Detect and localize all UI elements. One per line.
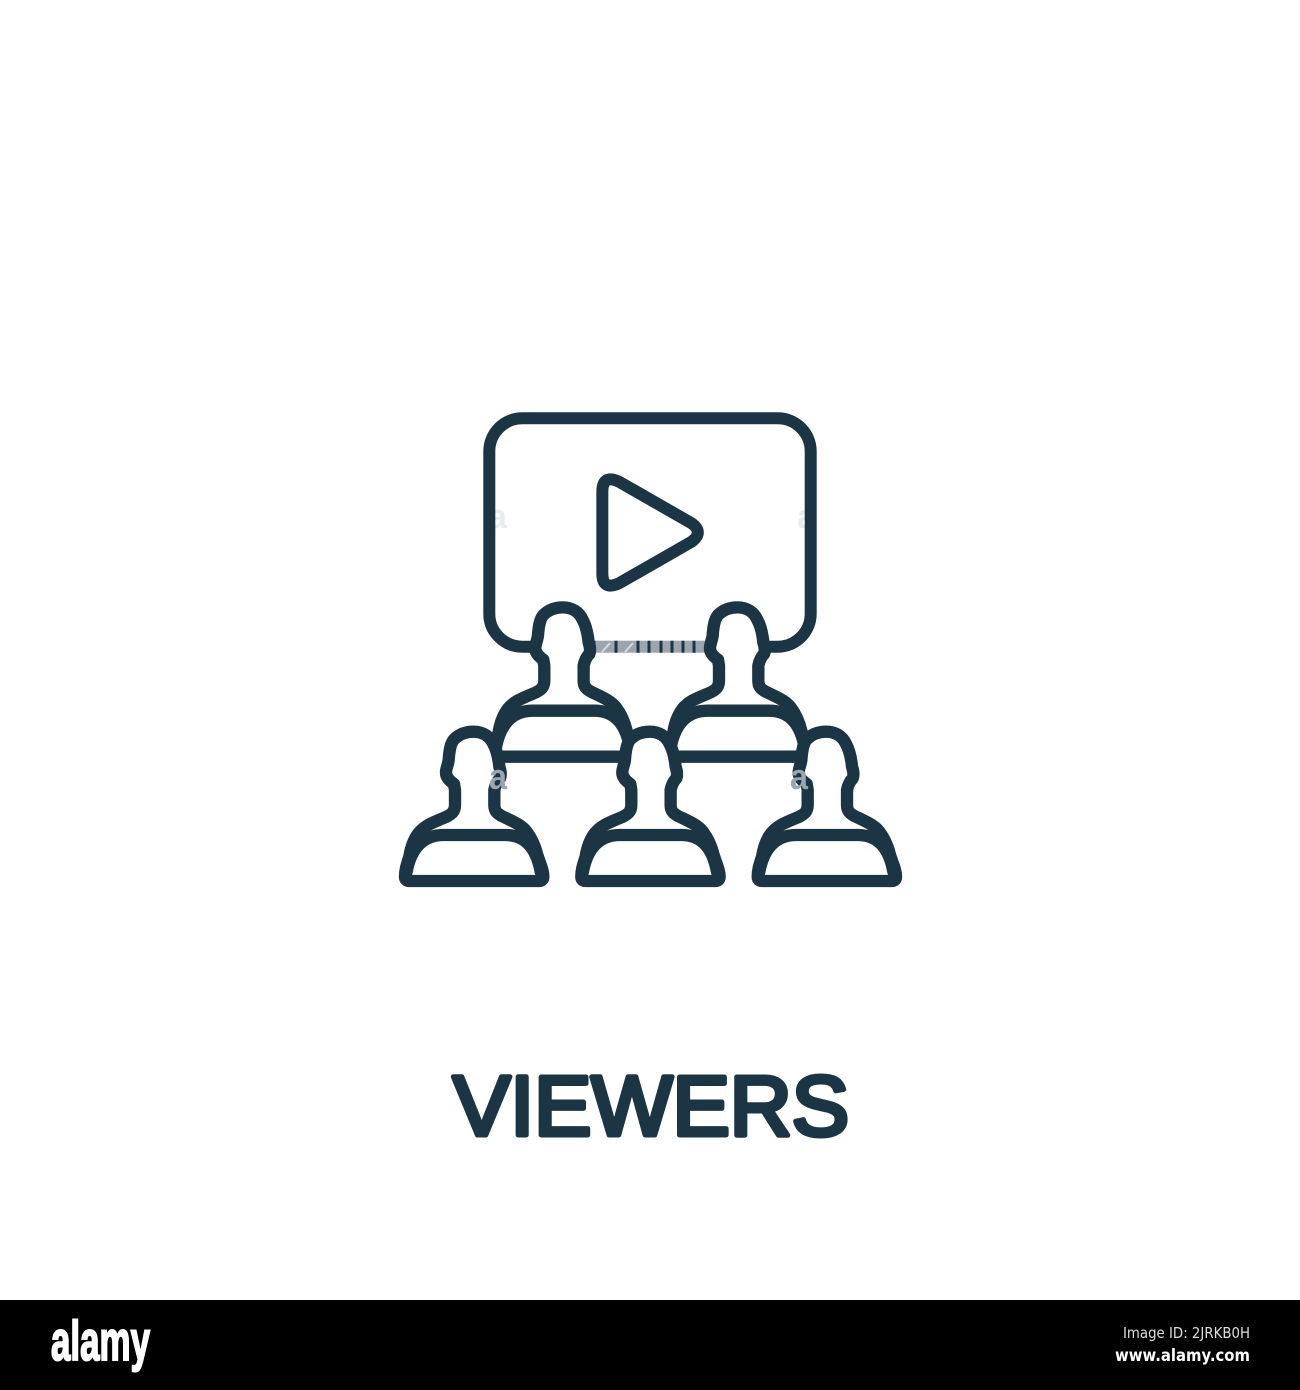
title: VIEWERS: [453, 1059, 849, 1153]
icon: front row viewer centre: [581, 732, 720, 881]
watermark letters over the viewers: a: [790, 756, 809, 797]
watermarked lower edge of the screen: [590, 641, 708, 653]
icon: video screen: [489, 418, 811, 653]
icon: back row viewer right: [669, 607, 807, 757]
faint watermark letters inside the screen: a: [488, 498, 508, 536]
website: www.alamy.com: [1115, 1346, 1250, 1366]
footer bar: [0, 1300, 1300, 1390]
icon: play triangle: [602, 479, 698, 586]
footer logo: alamy: [51, 1309, 150, 1372]
icon: front row viewer left: [405, 732, 543, 881]
icon: front row viewer right: [758, 732, 896, 881]
watermark letters over the viewers: a: [489, 756, 508, 797]
image id: Image ID: 2JRKB0H: [1123, 1324, 1250, 1342]
watermark letters over the viewers: [489, 756, 809, 797]
icon: back row viewer left: [494, 607, 633, 757]
faint watermark letters inside the screen: [488, 498, 817, 536]
faint watermark letters inside the screen: a: [797, 498, 817, 536]
